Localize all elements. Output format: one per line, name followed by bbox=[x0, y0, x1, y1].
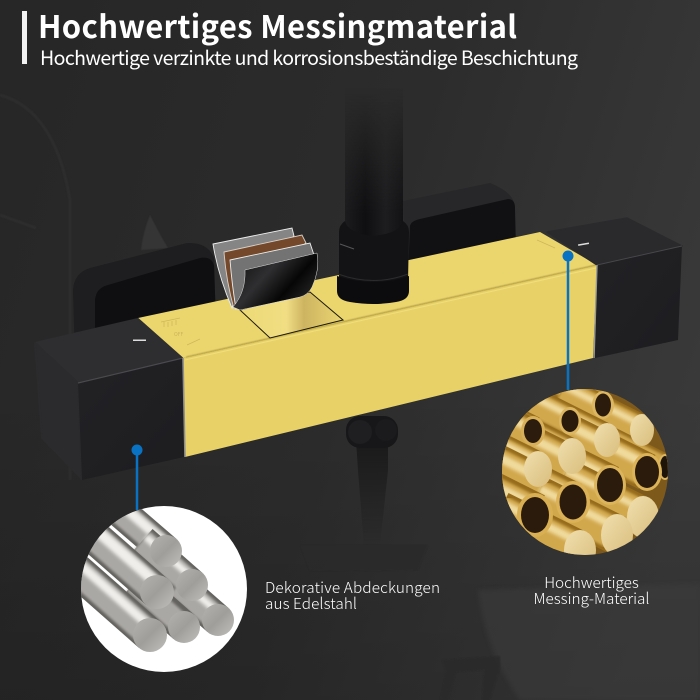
central riser pipe bbox=[337, 121, 409, 304]
left end cap bbox=[35, 319, 185, 480]
callout line: brass bbox=[562, 250, 574, 390]
stainless steel rods photo bbox=[81, 506, 247, 672]
label: brass: Hochwertiges bbox=[544, 571, 639, 593]
layer: black finish bbox=[233, 253, 318, 310]
tube bodies bbox=[502, 389, 668, 555]
right wall bracket bbox=[403, 183, 516, 275]
right end cap bbox=[547, 218, 682, 358]
left wall bracket bbox=[73, 243, 216, 360]
bar top face bbox=[138, 232, 597, 358]
off label: OFF bbox=[174, 331, 183, 338]
layer: inner grey bbox=[230, 243, 314, 309]
thermostat bar: brass body bbox=[138, 232, 597, 457]
label: stainless steel bbox=[265, 576, 440, 614]
tube end faces bbox=[517, 391, 668, 555]
rod end faces bbox=[133, 535, 234, 652]
label: brass: Messing-Material bbox=[534, 587, 649, 609]
layered coating sample bbox=[213, 228, 318, 310]
bar front face bbox=[183, 265, 597, 457]
label: stainless steel: aus Edelstahl bbox=[265, 592, 357, 614]
rod bodies bbox=[81, 509, 228, 648]
header accent bar bbox=[22, 11, 27, 64]
label: brass bbox=[534, 571, 649, 609]
lower pipe and elbow bbox=[346, 416, 398, 500]
label: stainless steel: Dekorative Abdeckungen bbox=[265, 576, 440, 598]
brass tubes photo bbox=[502, 389, 668, 555]
callout line: steel bbox=[132, 444, 142, 510]
layer: outer grey bbox=[213, 228, 294, 308]
control markings bbox=[161, 240, 555, 345]
recessed plate bbox=[240, 292, 343, 338]
subtitle: Hochwertige verzinkte und korrosionsbeständige Beschichtung bbox=[40, 42, 578, 71]
title: Hochwertiges Messingmaterial bbox=[38, 2, 517, 47]
layer: copper bbox=[224, 235, 306, 309]
